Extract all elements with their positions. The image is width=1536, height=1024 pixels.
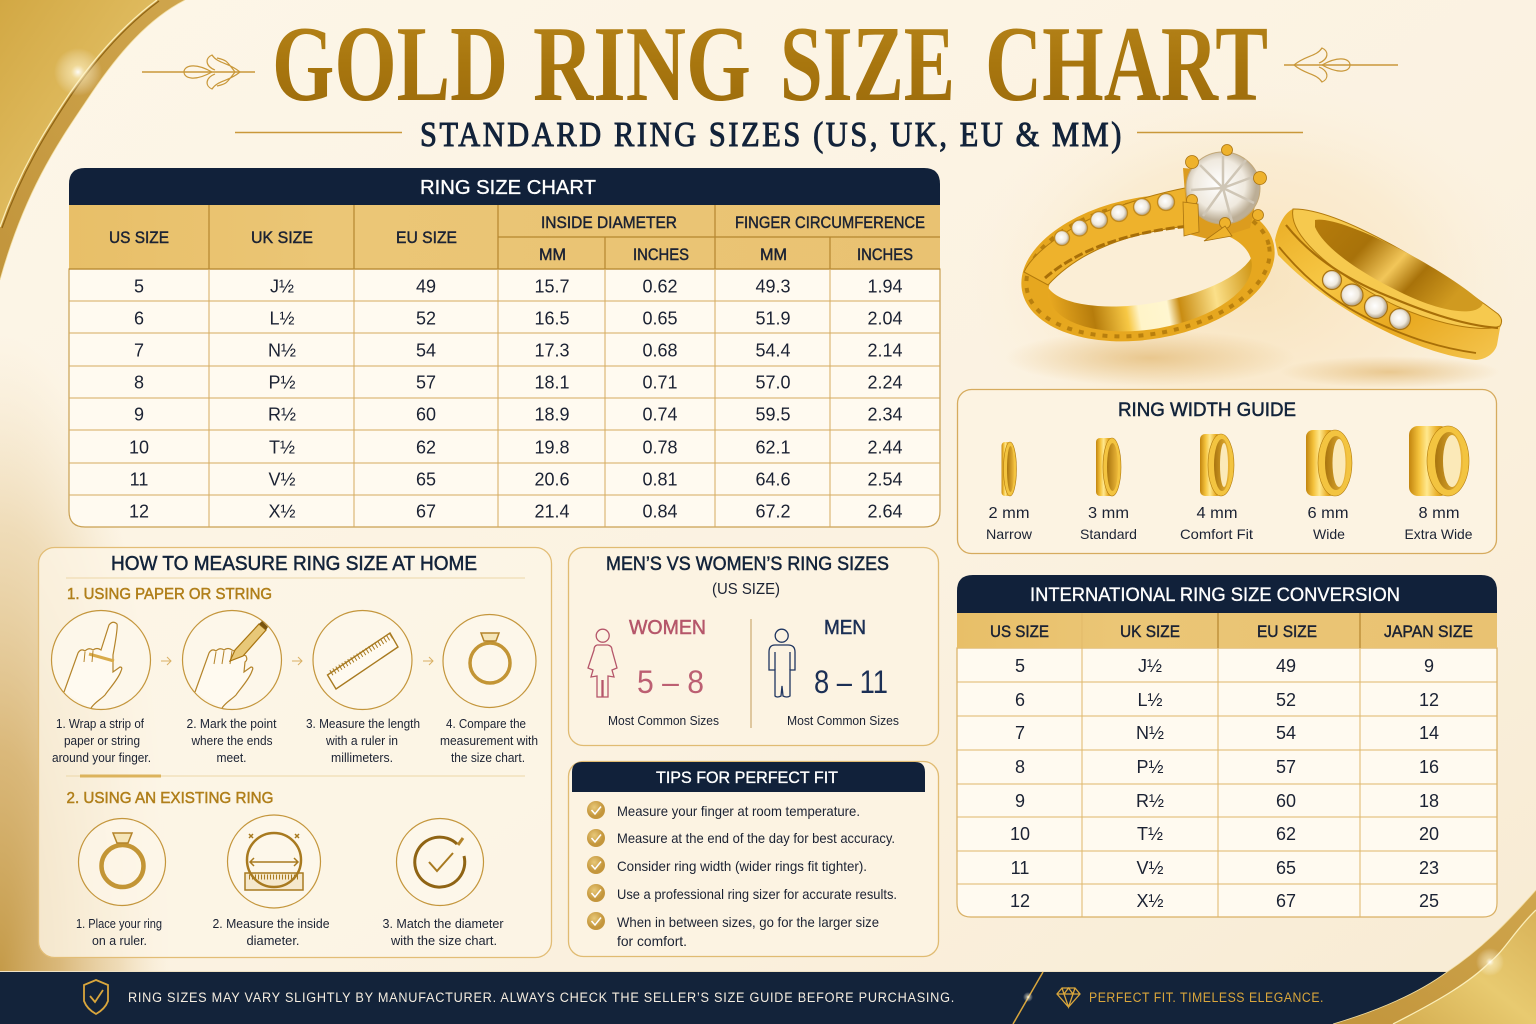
conv row 11: V½ [1136,858,1164,878]
step 2: mark point: where the ends [191,733,273,748]
row: US 5 [134,276,903,296]
conv row 12: X½ [1136,891,1164,911]
row: US 11: 2.54 [867,470,903,490]
panel: how to measure [38,548,552,958]
tips header [572,762,925,792]
conv row 11: 11 [1011,858,1029,878]
row: US 12 [129,502,903,522]
width: 2 mm [986,442,1033,542]
width: 3 mm: 3 mm [1088,505,1129,522]
row: US 10: 0.78 [642,438,678,458]
row: US 11: 0.81 [642,470,678,490]
row: US 6: 16.5 [534,308,570,328]
width: 4 mm: 4 mm [1196,505,1238,522]
tip 4: Use a professional ring sizer for accurate results. [617,886,897,902]
conversion title bar: INTERNATIONAL RING SIZE CONVERSION [1030,585,1400,606]
row: US 10: 10 [129,438,149,458]
conv row 9: 9 [1015,791,1025,811]
existing 2: measure diameter: 2. Measure the inside [212,916,330,931]
step 3: ruler: millimeters. [331,750,393,765]
panel: tips [568,762,938,956]
row: US 11: V½ [268,470,296,490]
conv row 6: 6 [1015,690,1025,710]
conv row 9 [1015,791,1439,811]
conv row 5: J½ [1138,656,1162,676]
conv row 8: 57 [1276,757,1296,777]
title: GOLD [272,5,508,124]
row: US 12: 21.4 [534,502,570,522]
row: US 6: 2.04 [867,308,903,328]
decorative gold swoosh bottom right [1333,890,1536,1024]
conv row 5 [1015,656,1434,676]
table column headers: FINGER CIRCUMFERENCE [735,213,925,232]
table column headers: MM [760,245,787,264]
row: US 7: 7 [134,340,144,360]
tip 1: Measure your finger at room temperature. [617,803,860,819]
row: US 7: N½ [268,340,296,360]
conv row 9: R½ [1136,791,1164,811]
width: 6 mm [1306,430,1352,542]
conv row 11: 23 [1419,858,1439,878]
width: 8 mm: 8 mm [1418,505,1460,522]
conversion column headers: US SIZE [990,622,1049,641]
conv row 6 [1015,690,1439,710]
conv row 12: 12 [1010,891,1030,911]
conv row 7 [1015,723,1439,743]
table: international conversion [957,575,1497,917]
conv row 5: 49 [1276,656,1296,676]
existing 1: place ring: on a ruler. [92,933,147,948]
icon: woman [588,629,617,697]
panel: ring width guide [958,390,1496,554]
flourish left [142,55,255,89]
row: US 8: 18.1 [534,372,570,392]
women column [588,617,719,728]
row: US 9: 9 [134,404,144,424]
row: US 10: 62.1 [755,438,791,458]
conv row 6: L½ [1137,690,1163,710]
conv row 9: 60 [1276,791,1296,811]
row: US 12: X½ [268,502,296,522]
existing 1: place ring: 1. Place your ring [76,916,162,931]
arrow [423,657,433,665]
subtitle rule left [235,132,402,134]
conv row 6: 52 [1276,690,1296,710]
conv row 10: 62 [1276,824,1296,844]
band ring [1275,209,1502,360]
row: US 6: 52 [416,308,436,328]
sub heading: (US SIZE) [712,581,780,598]
men column: Most Common Sizes [787,713,899,728]
row: US 7: 2.14 [867,340,903,360]
women column: Most Common Sizes [608,713,719,728]
row: US 9: 59.5 [755,404,791,424]
row: US 5: 0.62 [642,276,678,296]
existing 1: place ring [76,818,166,948]
tip 5 [587,912,879,949]
women column: WOMEN [629,617,706,639]
conversion column headers: UK SIZE [1120,622,1180,641]
step 1: wrap strip: 1. Wrap a strip of [56,716,144,731]
table column headers: US SIZE [109,228,169,247]
row: US 9 [134,404,903,424]
table column headers: MM [539,245,566,264]
width: 6 mm: 6 mm [1308,505,1348,522]
panel: men vs women [568,548,938,746]
width: 2 mm: 2 mm [988,505,1030,522]
channel stones [1322,270,1410,330]
flourish right [1284,48,1398,82]
conversion column headers [957,613,1497,648]
heading: HOW TO MEASURE RING SIZE AT HOME [111,553,477,575]
conv row 11: 65 [1276,858,1296,878]
conv row 6: 12 [1419,690,1439,710]
subheading: existing ring: 2. USING AN EXISTING RING [66,790,274,807]
illustration: gold rings [1005,144,1502,388]
conv row 5: 5 [1015,656,1025,676]
row: US 5: 15.7 [534,276,570,296]
row: US 11 [130,470,903,490]
step 2: mark point [182,610,282,765]
row: US 7: 0.68 [642,340,678,360]
men column: 8 – 11 [814,664,888,700]
step 4: compare: 4. Compare the [446,716,526,731]
subtitle rule right [1137,132,1303,134]
step 2: mark point: meet. [216,750,246,765]
step 3: ruler [306,610,420,765]
pencil [230,624,266,661]
lower left gold wash [0,335,170,975]
row: US 6: 51.9 [755,308,791,328]
row: US 10: 19.8 [534,438,570,458]
row: US 8 [134,372,903,392]
pave stones [1054,194,1174,246]
table column headers: EU SIZE [396,228,457,247]
arrow [292,657,302,665]
row: US 8: 2.24 [867,372,903,392]
engagement ring [1021,144,1275,342]
step 4: compare [440,614,538,765]
arrow [161,657,171,665]
row: US 9: 2.34 [867,404,903,424]
conv row 10: T½ [1137,824,1163,844]
title [272,5,1268,124]
row: US 11: 64.6 [755,470,791,490]
row: US 10 [129,438,903,458]
conv row 9: 18 [1419,791,1439,811]
tagline: PERFECT FIT. TIMELESS ELEGANCE. [1089,990,1324,1005]
width: 3 mm [1080,438,1137,542]
title: SIZE [780,5,955,124]
men column [769,617,899,728]
step 1: wrap strip: around your finger. [52,750,151,765]
width: 8 mm [1404,426,1473,542]
heading: RING WIDTH GUIDE [1118,400,1296,421]
row: US 7: 17.3 [534,340,570,360]
conv row 12 [1010,891,1439,911]
row: US 5: 1.94 [867,276,903,296]
row: US 7 [134,340,903,360]
subheading: paper or string: 1. USING PAPER OR STRING [67,586,272,603]
table column headers [69,205,940,269]
icon: diamond [1057,988,1080,1007]
row: US 9: 60 [416,404,436,424]
row: US 12: 67 [416,502,436,522]
row: US 5: 49.3 [755,276,791,296]
conv row 7: 7 [1015,723,1025,743]
row: US 5: 5 [134,276,144,296]
step 1: wrap strip: paper or string [64,733,140,748]
row: US 8: 57.0 [755,372,791,392]
row: US 5: 49 [416,276,436,296]
width: 4 mm: Comfort Fit [1180,526,1253,542]
conversion column headers: EU SIZE [1257,622,1317,641]
footer band [0,972,1536,1024]
conv row 10: 10 [1010,824,1030,844]
row: US 12: 2.64 [867,502,903,522]
row: US 8: 0.71 [642,372,678,392]
existing 3: match diameter: with the size chart. [390,933,497,948]
conv row 7: 54 [1276,723,1296,743]
row: US 9: 0.74 [642,404,678,424]
row: US 7: 54.4 [755,340,791,360]
row: US 10: T½ [269,438,295,458]
row: US 12: 67.2 [755,502,791,522]
tip 2: Measure at the end of the day for best accuracy. [617,830,895,846]
title: RING [533,5,751,124]
conv row 10 [1010,824,1439,844]
conv row 5: 9 [1424,656,1434,676]
existing 2: measure diameter [212,815,330,948]
tip 5: for comfort. [617,933,687,949]
tip 5: When in between sizes, go for the larger size [617,914,879,930]
step 4: compare: measurement with [440,733,538,748]
existing 3: match diameter [382,818,504,948]
conv row 10: 20 [1419,824,1439,844]
step 4: compare: the size chart. [451,750,525,765]
width: 4 mm [1180,434,1253,542]
row: US 6 [134,308,903,328]
existing 3: match diameter: 3. Match the diameter [382,916,504,931]
row: US 6: L½ [269,308,295,328]
table column headers: UK SIZE [251,228,313,247]
row: US 12: 0.84 [642,502,678,522]
table: ring size chart [69,168,940,527]
table title bar [69,168,940,205]
conv row 7: N½ [1136,723,1164,743]
decorative gold swoosh top left [0,0,185,280]
conv row 8: 16 [1419,757,1439,777]
step 3: ruler: 3. Measure the length [306,716,420,731]
title: CHART [985,5,1268,124]
row: US 8: 8 [134,372,144,392]
step 3: ruler: with a ruler in [325,733,398,748]
row: US 6: 0.65 [642,308,678,328]
conv row 11 [1011,858,1439,878]
conversion column headers: JAPAN SIZE [1384,622,1473,641]
center diamond [1183,144,1266,241]
conversion title bar [957,575,1497,613]
step 1: wrap strip [52,610,151,765]
row: US 9: 18.9 [534,404,570,424]
warm glow behind rings [964,80,1536,480]
width: 6 mm: Wide [1313,526,1345,542]
row: US 12: 12 [129,502,149,522]
row: US 8: 57 [416,372,436,392]
existing 2: measure diameter: diameter. [246,933,300,948]
row: US 7: 54 [416,340,436,360]
conv row 7: 14 [1419,723,1439,743]
conv row 8 [1015,757,1439,777]
tip 3: Consider ring width (wider rings fit tighter). [617,858,867,874]
conv row 12: 67 [1276,891,1296,911]
table column headers: INSIDE DIAMETER [541,213,677,232]
width: 3 mm: Standard [1080,526,1137,542]
row: US 10: 62 [416,438,436,458]
row: US 9: R½ [268,404,296,424]
ring shadows [1005,330,1500,388]
row: US 8: P½ [268,372,296,392]
row: US 6: 6 [134,308,144,328]
conv row 12: 25 [1419,891,1439,911]
width: 2 mm: Narrow [986,526,1033,542]
table column headers: INCHES [857,245,913,264]
tips header: TIPS FOR PERFECT FIT [656,768,838,787]
table title bar: RING SIZE CHART [420,177,596,199]
row: US 11: 65 [416,470,436,490]
icon: shield [84,980,108,1014]
conv row 8: 8 [1015,757,1025,777]
step 2: mark point: 2. Mark the point [186,716,277,731]
heading: MEN’S VS WOMEN’S RING SIZES [606,554,889,575]
icon: man [769,629,795,697]
subtitle: STANDARD RING SIZES (US, UK, EU & MM) [420,115,1124,154]
row: US 11: 20.6 [534,470,570,490]
row: US 5: J½ [270,276,294,296]
women column: 5 – 8 [637,664,704,700]
table column headers: INCHES [633,245,689,264]
row: US 11: 11 [130,470,148,490]
conv row 8: P½ [1136,757,1164,777]
width: 8 mm: Extra Wide [1404,526,1473,542]
men column: MEN [824,617,866,639]
row: US 10: 2.44 [867,438,903,458]
footer note: RING SIZES MAY VARY SLIGHTLY BY MANUFACTURER. ALWAYS CHECK THE SELLER’S SIZE GUIDE BEFORE PURCHASING. [128,990,955,1005]
